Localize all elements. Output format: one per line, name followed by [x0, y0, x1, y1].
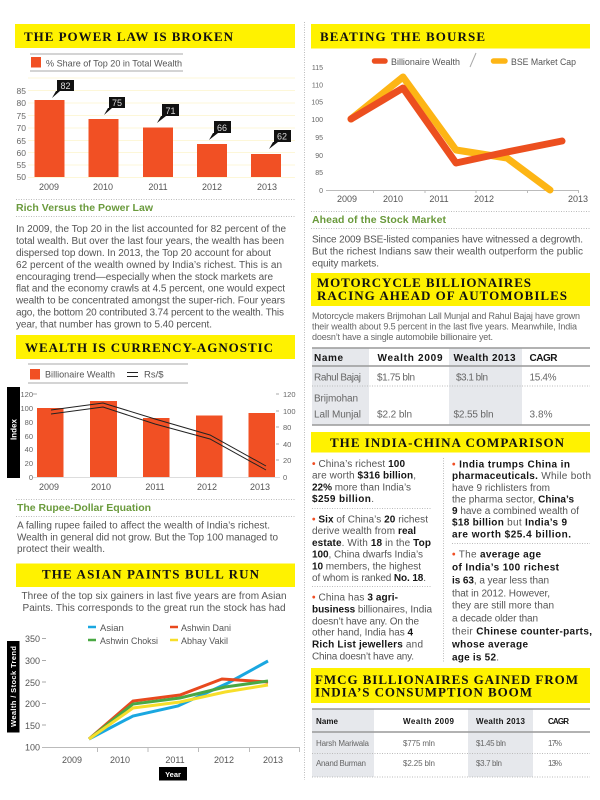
- heading: fmcg billionaires gained from india's consumption boom: INDIA’S CONSUMPTION BOOM: [315, 684, 532, 700]
- panel: the power law is broken: [15, 24, 295, 330]
- table: fmcg billionaires wealth: CAGR: [548, 717, 569, 726]
- text block: average age: age is 52.: [452, 652, 499, 664]
- bar chart: share of top 20 in total wealth: 60: [17, 148, 26, 158]
- text block: china richest 100: [312, 459, 416, 505]
- panel: the india-china comparison: [311, 432, 592, 664]
- text block: motorcycle body: [312, 311, 580, 342]
- text block: rupee-dollar body: protect their wealth.: [17, 544, 105, 555]
- text block: china real estate: estate. With 18 in the Top: [312, 538, 431, 549]
- combo chart: billionaire wealth vs rupee: 100: [20, 404, 33, 413]
- line chart: wealth vs bse market cap: 105: [311, 100, 323, 106]
- legend: billionaire wealth and rupee: Billionaire Wealth: [45, 370, 115, 380]
- line chart: wealth vs bse market cap: [311, 65, 588, 204]
- line chart: wealth and stock trend: 2013: [263, 755, 283, 765]
- line chart: wealth vs bse market cap: 2009: [337, 194, 357, 204]
- text block: power law body: 62 percent of the wealth owned by India’s richest. This is an: [16, 260, 282, 271]
- text block: china richest 100: are worth $316 billion,: [312, 470, 416, 482]
- bar chart: share of top 20 in total wealth: 80: [17, 98, 26, 108]
- heading: the power law is broken: [15, 24, 295, 48]
- line chart: wealth and stock trend: 2010: [110, 755, 130, 765]
- line chart: wealth vs bse market cap: 115: [312, 65, 323, 72]
- text block: agri-business and jewellers: • China has 3 agri-: [312, 592, 398, 604]
- combo chart: billionaire wealth vs rupee: 2013: [250, 482, 270, 492]
- table: fmcg billionaires wealth: $3.7 bln: [476, 759, 502, 768]
- text block: stock market body: Since 2009 BSE-listed companies have witnessed a degrowth.: [312, 234, 583, 246]
- bar chart: share of top 20 in total wealth: 2012: [202, 182, 222, 192]
- heading: the asian paints bull run: THE ASIAN PAINTS BULL RUN: [42, 566, 260, 582]
- legend: asian paints series: Abhay Vakil: [181, 636, 228, 647]
- legend: share of top 20: % Share of Top 20 in Total Wealth: [46, 58, 182, 70]
- text block: power law body: encouraging trend—especially when the stock markets are: [16, 272, 273, 283]
- line chart: wealth and stock trend: 2012: [214, 755, 234, 765]
- text block: pharmaceuticals: pharmaceuticals. While both: [452, 471, 591, 482]
- bar chart: share of top 20 in total wealth: [17, 78, 295, 192]
- text block: average age: [451, 550, 592, 664]
- combo chart: billionaire wealth vs rupee: 80: [25, 418, 33, 427]
- text block: pharmaceuticals: • India trumps China in: [452, 460, 570, 470]
- heading: wealth is currency-agnostic: WEALTH IS CURRENCY-AGNOSTIC: [25, 340, 273, 355]
- subheading: the rupee-dollar equation: The Rupee-Dollar Equation: [17, 502, 151, 514]
- line chart: wealth and stock trend: 250: [25, 678, 40, 688]
- text block: pharmaceuticals: 9 have a combined wealth of: [452, 506, 579, 517]
- table: motorcycle billionaires wealth: Rahul Bajaj: [314, 372, 361, 384]
- heading: beating the bourse: BEATING THE BOURSE: [320, 29, 485, 44]
- heading: wealth is currency-agnostic: [16, 335, 295, 359]
- table: motorcycle billionaires wealth: Name: [314, 353, 343, 364]
- legend: asian paints series: [88, 623, 231, 647]
- text block: power law body: flat and the economy crawls at 4.5 percent, one would expect: [16, 284, 285, 294]
- text block: agri-business and jewellers: [312, 592, 432, 662]
- text block: power law body: dispersed top down. In 2013, the Top 20 account for about: [16, 248, 271, 259]
- combo chart: billionaire wealth vs rupee: 120: [283, 390, 296, 399]
- panel: beating the bourse: [311, 24, 590, 270]
- table: motorcycle billionaires wealth: Wealth 2009: [378, 353, 443, 364]
- text block: china real estate: 100, China dwarfs India’s: [312, 550, 423, 560]
- axis label: index: [7, 387, 20, 478]
- combo chart: billionaire wealth vs rupee: 2010: [91, 482, 111, 492]
- heading: the asian paints bull run: [16, 564, 295, 587]
- combo chart: billionaire wealth vs rupee: 20: [25, 459, 33, 468]
- legend: asian paints series: Asian: [100, 623, 124, 634]
- bar chart: share of top 20 in total wealth: 2011: [148, 182, 168, 192]
- heading: fmcg billionaires gained from india's consumption boom: FMCG BILLIONAIRES GAINED FROM: [315, 672, 578, 687]
- text block: power law body: ago, the bottom 20 contributed 3.74 percent to the wealth. This: [16, 308, 284, 318]
- subheading: ahead of the stock market: Ahead of the Stock Market: [312, 214, 446, 226]
- text block: china real estate: • Six of China’s 20 richest: [312, 514, 428, 526]
- axis label: year: Year: [165, 770, 181, 779]
- combo chart: billionaire wealth vs rupee: 2011: [145, 482, 165, 492]
- text block: motorcycle body: doesn’t have a single automobile billionaire yet.: [312, 332, 493, 342]
- line chart: wealth vs bse market cap: 85: [315, 170, 323, 177]
- legend: billionaire wealth and market cap: Billionaire Wealth: [391, 57, 460, 68]
- text block: agri-business and jewellers: other hand, India has 4: [312, 628, 413, 638]
- line chart: wealth and stock trend: 100: [25, 742, 40, 752]
- table: fmcg billionaires wealth: Harsh Mariwala: [316, 739, 370, 748]
- legend: billionaire wealth and rupee: [28, 364, 188, 383]
- table: fmcg billionaires wealth: 17%: [548, 739, 562, 748]
- bar chart: share of top 20 in total wealth: 65: [17, 136, 26, 146]
- text block: china real estate: of whom is ranked No. 18.: [312, 573, 426, 584]
- text block: pharmaceuticals: are worth $25.4 billion.: [452, 530, 571, 540]
- table: fmcg billionaires wealth: [312, 709, 590, 777]
- text block: stock market body: equity markets.: [312, 258, 379, 270]
- text block: china real estate: 10 members, the highest: [312, 562, 421, 572]
- text block: rupee-dollar body: Wealth in general did not grow. But the Top 100 managed to: [17, 532, 278, 544]
- text block: china real estate: derive wealth from real: [312, 526, 416, 537]
- text block: china richest 100: 22% more than India’s: [312, 482, 411, 494]
- line chart: wealth vs bse market cap: 90: [315, 153, 323, 160]
- text block: asian paints body: Three of the top six gainers in last five years are from Asian: [22, 591, 286, 602]
- text block: asian paints body: [22, 591, 286, 614]
- text block: motorcycle body: Motorcycle makers Brijmohan Lall Munjal and Rahul Bajaj have grown: [312, 311, 580, 321]
- bar chart: share of top 20 in total wealth: 2009: [39, 182, 59, 192]
- text block: average age: their Chinese counter-parts,: [452, 626, 592, 638]
- text block: power law body: year, that number has grown to 5.40 percent.: [16, 320, 212, 330]
- table: fmcg billionaires wealth: $1.45 bln: [476, 739, 506, 748]
- axis label: wealth / stock trend: Wealth / Stock Trend: [9, 646, 18, 727]
- text block: china real estate: [312, 514, 431, 584]
- line chart: wealth and stock trend: 350: [25, 634, 40, 644]
- legend: asian paints series: Ashwin Choksi: [100, 636, 158, 647]
- line chart: wealth and stock trend: 150: [25, 721, 40, 731]
- heading: motorcycle billionaires racing ahead of automobiles: MOTORCYCLE BILLIONAIRES: [317, 275, 531, 290]
- bar chart: share of top 20 in total wealth: 75: [17, 111, 26, 121]
- line chart: wealth and stock trend: 200: [25, 699, 40, 709]
- axis label: index: Index: [10, 419, 18, 440]
- table: fmcg billionaires wealth: Anand Burman: [316, 759, 366, 768]
- line chart: wealth vs bse market cap: 100: [311, 117, 323, 124]
- line chart: wealth vs bse market cap: 2011: [429, 194, 449, 204]
- table: fmcg billionaires wealth: Wealth 2009: [403, 717, 455, 726]
- table: motorcycle billionaires wealth: $1.75 bln: [377, 372, 415, 384]
- table: motorcycle billionaires wealth: 15.4%: [530, 372, 557, 384]
- panel: the asian paints bull run: [7, 564, 300, 780]
- combo chart: billionaire wealth vs rupee: 40: [25, 445, 33, 454]
- combo chart: billionaire wealth vs rupee: 60: [25, 432, 33, 441]
- bar chart: share of top 20 in total wealth: 66: [217, 123, 227, 133]
- text block: power law body: total wealth. But over the last four years, the wealth has been: [16, 236, 284, 247]
- bar chart: share of top 20 in total wealth: 55: [17, 160, 26, 170]
- heading: motorcycle billionaires racing ahead of automobiles: [311, 273, 590, 306]
- text block: pharmaceuticals: the pharma sector, China’s: [452, 494, 574, 506]
- text block: average age: that in 2012. However,: [452, 588, 550, 600]
- combo chart: billionaire wealth vs rupee: 0: [283, 473, 287, 482]
- text block: stock market body: But the richest Indians saw their wealth outperform the public: [312, 246, 583, 258]
- combo chart: billionaire wealth vs rupee: 40: [283, 440, 291, 449]
- table: motorcycle billionaires wealth: CAGR: [530, 353, 558, 364]
- text block: agri-business and jewellers: doesn’t have any. On the: [312, 616, 419, 628]
- line chart: wealth vs bse market cap: 2013: [568, 194, 588, 204]
- text block: average age: they are still more than: [452, 600, 554, 612]
- text block: rupee-dollar body: A falling rupee failed to affect the wealth of India’s richest.: [17, 520, 270, 532]
- combo chart: billionaire wealth vs rupee: [20, 390, 296, 492]
- table: fmcg billionaires wealth: 13%: [548, 759, 562, 768]
- bar chart: share of top 20 in total wealth: 70: [17, 123, 26, 133]
- combo chart: billionaire wealth vs rupee: 2012: [197, 482, 217, 492]
- text block: pharmaceuticals: $18 billion but India’s 9: [452, 518, 567, 528]
- table: motorcycle billionaires wealth: Wealth 2013: [454, 353, 516, 364]
- text block: asian paints body: Paints. This corresponds to the great run the stock has had: [22, 603, 286, 614]
- heading: the india-china comparison: THE INDIA-CHINA COMPARISON: [330, 435, 565, 450]
- axis label: wealth / stock trend: [7, 641, 20, 732]
- text block: power law body: [15, 224, 286, 330]
- line chart: wealth vs bse market cap: 110: [312, 82, 323, 90]
- line chart: wealth vs bse market cap: 0: [319, 188, 323, 195]
- table: motorcycle billionaires wealth: $2.55 bln: [454, 410, 494, 420]
- bar chart: share of top 20 in total wealth: 85: [17, 86, 26, 96]
- bar chart: share of top 20 in total wealth: 71: [165, 106, 176, 116]
- table: motorcycle billionaires wealth: $2.2 bln: [377, 410, 412, 420]
- line chart: wealth vs bse market cap: 2010: [383, 194, 403, 204]
- axis label: year: [159, 767, 187, 780]
- text block: average age: whose average: [451, 640, 528, 650]
- table: fmcg billionaires wealth: Name: [316, 717, 339, 726]
- table: motorcycle billionaires wealth: $3.1 bln: [456, 372, 488, 384]
- text block: average age: a decade older than: [452, 614, 538, 624]
- heading: the india-china comparison: [311, 432, 590, 452]
- combo chart: billionaire wealth vs rupee: 100: [283, 407, 296, 416]
- table: motorcycle billionaires wealth: [312, 348, 590, 425]
- text block: average age: • The average age: [452, 550, 541, 560]
- text block: average age: of India’s 100 richest: [452, 562, 560, 574]
- table: fmcg billionaires wealth: $775 mln: [403, 739, 435, 748]
- text block: pharmaceuticals: have 9 richlisters from: [452, 483, 550, 494]
- text block: china richest 100: • China’s richest 100: [312, 459, 405, 470]
- text block: pharmaceuticals: [452, 460, 591, 540]
- bar chart: share of top 20 in total wealth: 2010: [93, 182, 113, 192]
- text block: china richest 100: $259 billion.: [312, 494, 374, 505]
- text block: average age: is 63, a year less than: [452, 576, 549, 586]
- panel: wealth is currency-agnostic: [7, 335, 296, 555]
- line chart: wealth and stock trend: 2009: [62, 755, 82, 765]
- bar chart: share of top 20 in total wealth: 82: [60, 81, 71, 91]
- table: fmcg billionaires wealth: $2.25 bln: [403, 759, 435, 768]
- bar chart: share of top 20 in total wealth: 62: [277, 132, 287, 142]
- heading: motorcycle billionaires racing ahead of automobiles: RACING AHEAD OF AUTOMOBILES: [317, 288, 567, 303]
- text block: stock market body: [312, 234, 583, 270]
- text block: agri-business and jewellers: business billionaires, India: [312, 604, 432, 616]
- text block: rupee-dollar body: [17, 520, 278, 555]
- legend: billionaire wealth and market cap: [374, 53, 576, 68]
- text block: motorcycle body: their wealth about 9.5 percent in the last five years. Meanwhile, India: [312, 322, 577, 332]
- combo chart: billionaire wealth vs rupee: 20: [283, 456, 291, 465]
- legend: asian paints series: Ashwin Dani: [181, 623, 231, 634]
- table: motorcycle billionaires wealth: Lall Munjal: [314, 410, 361, 420]
- legend: billionaire wealth and market cap: BSE Market Cap: [511, 57, 576, 68]
- text block: agri-business and jewellers: China doesn’t have any.: [312, 652, 414, 662]
- table: motorcycle billionaires wealth: Brijmohan: [314, 394, 358, 404]
- text block: agri-business and jewellers: Rich List jewellers and: [312, 640, 423, 650]
- combo chart: billionaire wealth vs rupee: 0: [29, 473, 33, 482]
- line chart: wealth vs bse market cap: 2012: [474, 194, 494, 204]
- line chart: wealth and stock trend: 300: [25, 656, 40, 666]
- text block: power law body: In 2009, the Top 20 in the list accounted for 82 percent of the: [16, 224, 286, 235]
- text block: power law body: wealth to be concentrated amongst the super-rich. Four years: [15, 296, 285, 306]
- legend: share of top 20: [30, 54, 183, 71]
- line chart: wealth and stock trend: 2011: [165, 755, 185, 765]
- heading: fmcg billionaires gained from india's consumption boom: [311, 668, 590, 703]
- table: motorcycle billionaires wealth: 3.8%: [530, 410, 553, 420]
- bar chart: share of top 20 in total wealth: 75: [112, 98, 122, 108]
- subheading: rich versus the power law: Rich Versus the Power Law: [16, 202, 154, 214]
- table: fmcg billionaires wealth: Wealth 2013: [476, 717, 526, 726]
- line chart: wealth and stock trend: [25, 634, 300, 765]
- bar chart: share of top 20 in total wealth: 50: [17, 172, 26, 182]
- combo chart: billionaire wealth vs rupee: 80: [283, 423, 291, 432]
- combo chart: billionaire wealth vs rupee: 2009: [39, 482, 59, 492]
- panel: fmcg billionaires: [311, 668, 590, 777]
- heading: beating the bourse: [311, 24, 590, 48]
- heading: the power law is broken: THE POWER LAW IS BROKEN: [24, 29, 234, 44]
- line chart: wealth vs bse market cap: 95: [315, 135, 323, 142]
- bar chart: share of top 20 in total wealth: 2013: [257, 182, 277, 192]
- legend: billionaire wealth and rupee: Rs/$: [144, 370, 164, 380]
- panel: motorcycle billionaires: [311, 273, 590, 425]
- combo chart: billionaire wealth vs rupee: 120: [20, 390, 33, 399]
